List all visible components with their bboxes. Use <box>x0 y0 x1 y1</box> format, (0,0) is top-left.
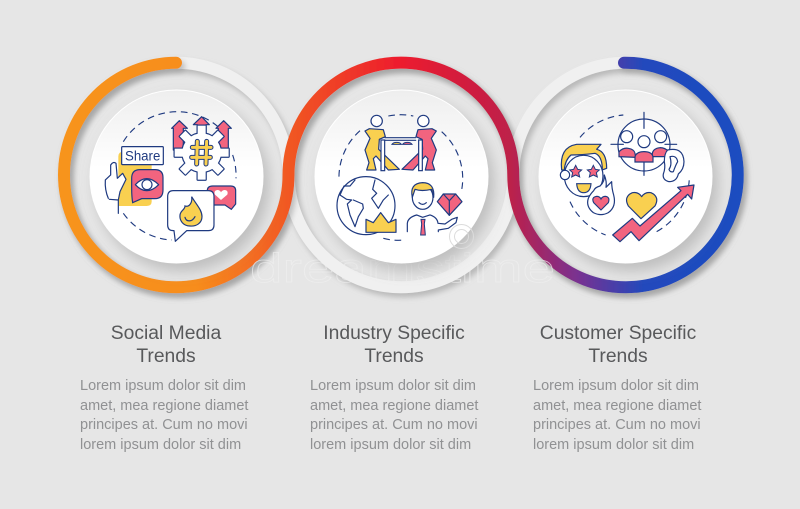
icon: social media <box>105 112 236 241</box>
dashed circle 2 <box>339 115 463 240</box>
heading: industry <box>323 323 465 366</box>
text: social media: amet, mea regione diamet <box>80 398 248 414</box>
gear <box>175 126 229 180</box>
hand <box>105 162 126 200</box>
text: social media: principes at. Cum no movi <box>80 417 248 433</box>
white discs <box>90 90 712 263</box>
fire bubble <box>168 191 214 241</box>
share label: Share <box>125 148 161 164</box>
diamond <box>437 194 462 215</box>
light ring tracks <box>64 63 738 287</box>
icon: industry <box>337 115 463 240</box>
target with audience <box>611 112 677 175</box>
yellow heart <box>627 192 657 219</box>
heading: social media <box>111 323 222 366</box>
ear <box>663 149 684 182</box>
text: industry <box>310 378 478 453</box>
heading: social media: Social Media <box>111 323 221 344</box>
table <box>381 138 422 171</box>
phone <box>118 152 152 213</box>
hashtag <box>192 141 211 164</box>
crown <box>366 213 396 232</box>
heading: customer: Customer Specific <box>540 323 696 344</box>
dashed circle 3 <box>570 115 689 235</box>
person left <box>365 115 399 170</box>
text: industry: lorem ipsum dolor sit dim <box>310 437 471 453</box>
dashed circle 1 <box>123 112 236 240</box>
heading: customer <box>540 323 696 366</box>
fire heart <box>588 175 614 215</box>
heading: social media: Trends <box>136 346 196 366</box>
globe <box>337 177 395 235</box>
watermark: dreamstime <box>250 245 555 291</box>
text: customer: Lorem ipsum dolor sit dim <box>533 378 699 394</box>
text: industry: principes at. Cum no movi <box>310 417 478 433</box>
text: social media <box>80 378 248 453</box>
text: customer: lorem ipsum dolor sit dim <box>533 437 694 453</box>
eye bubble <box>132 170 163 203</box>
icon: customer <box>560 112 694 242</box>
text: customer: principes at. Cum no movi <box>533 417 701 433</box>
text: customer <box>533 378 702 453</box>
heading: customer: Trends <box>588 346 648 366</box>
growth arrow <box>613 185 694 242</box>
businessman <box>407 183 457 235</box>
text: social media: Lorem ipsum dolor sit dim <box>80 378 246 394</box>
watermark logo <box>450 224 474 248</box>
face <box>560 144 607 197</box>
gradient ribbon <box>64 63 738 287</box>
text: industry: Lorem ipsum dolor sit dim <box>310 378 476 394</box>
heading: industry: Industry Specific <box>323 323 465 344</box>
text: customer: amet, mea regione diamet <box>533 398 701 414</box>
text: social media: lorem ipsum dolor sit dim <box>80 437 241 453</box>
person right <box>402 115 436 170</box>
growth arrows <box>172 117 231 150</box>
heading: industry: Trends <box>364 346 424 366</box>
heart bubble <box>207 186 236 209</box>
text: industry: amet, mea regione diamet <box>310 398 478 414</box>
